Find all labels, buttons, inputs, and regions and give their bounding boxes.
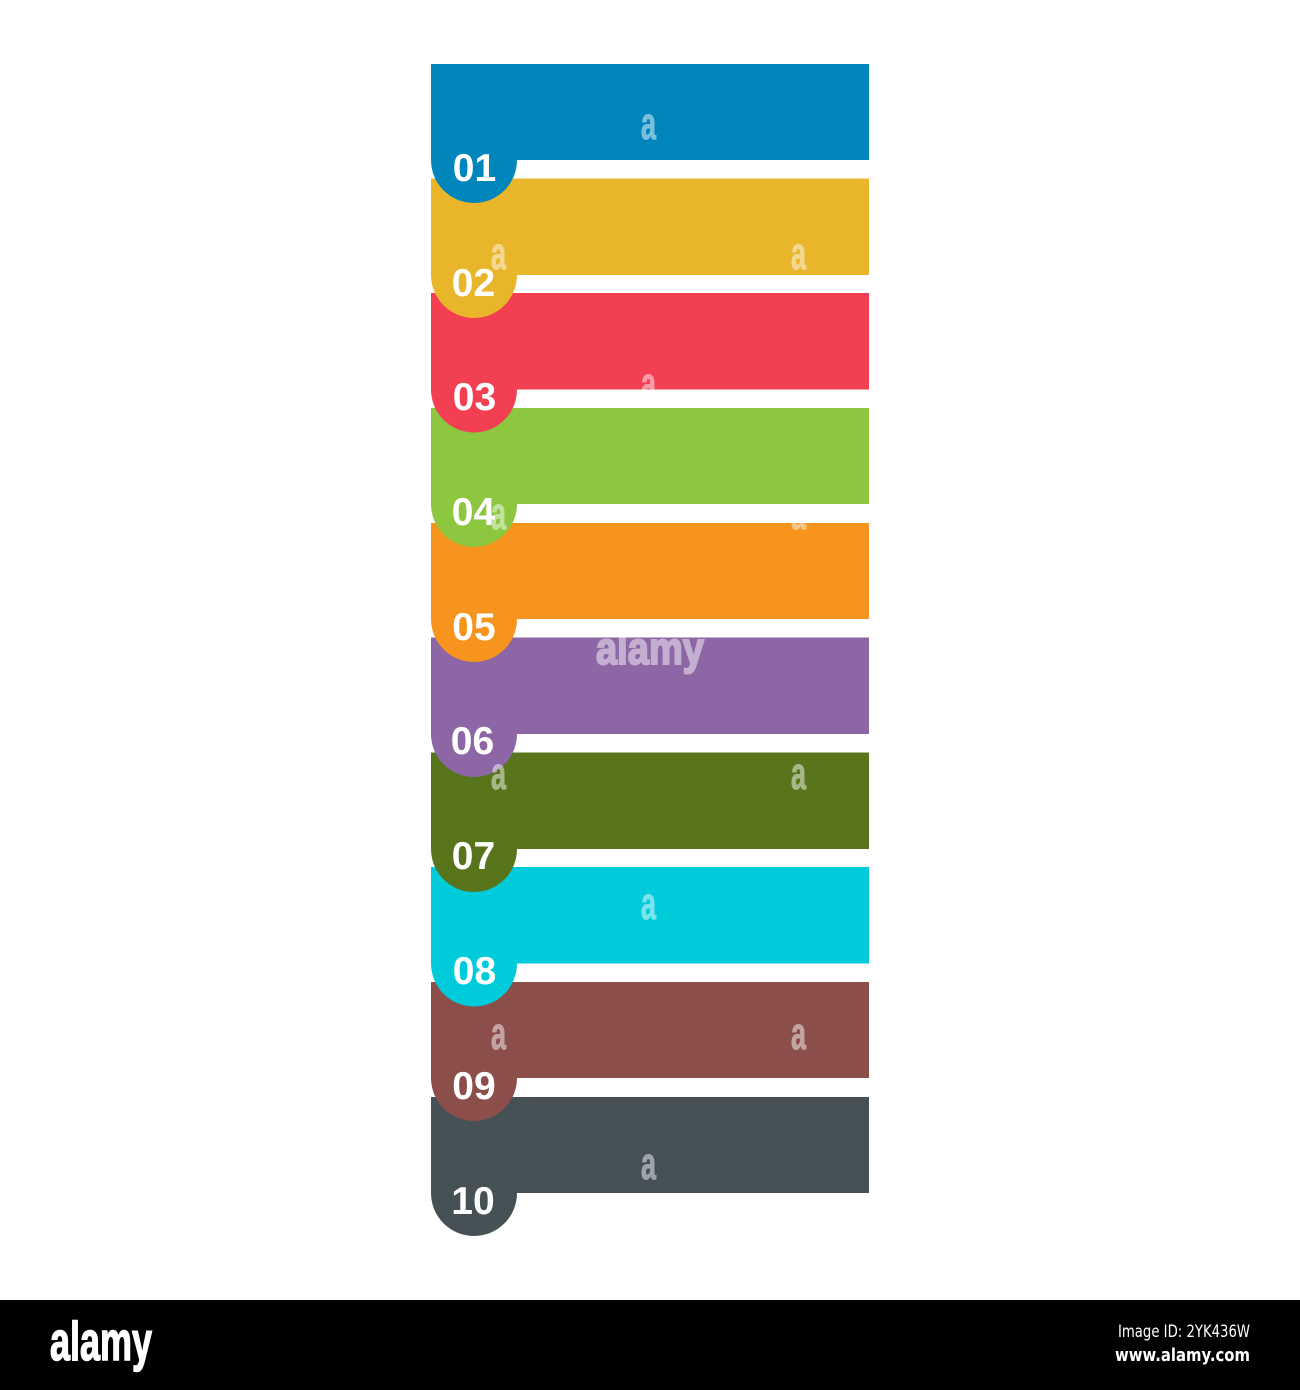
stock watermark overlay: a <box>791 228 807 279</box>
image id: Image ID: 2YK436W <box>1118 1322 1250 1342</box>
website: www.alamy.com <box>1115 1345 1250 1366</box>
item 01: blue bar with tab <box>431 64 869 203</box>
footer bar <box>0 1300 1300 1390</box>
footer logo: alamy <box>50 1310 152 1372</box>
item 05: orange bar with tab: 05 <box>452 606 496 649</box>
stock watermark overlay: a <box>791 1008 807 1059</box>
item 08: cyan bar with tab <box>431 867 869 1006</box>
stock watermark overlay: a <box>791 488 807 539</box>
stock watermark overlay: a <box>641 1138 657 1189</box>
stock watermark overlay: a <box>491 488 507 539</box>
stock watermark overlay: a <box>491 748 507 799</box>
item 03: red bar with tab: 03 <box>453 376 496 419</box>
stock watermark overlay: a <box>791 748 807 799</box>
item 02: yellow bar with tab <box>431 178 869 318</box>
item 04: light green bar with tab: 04 <box>452 491 495 534</box>
stock watermark overlay: alamy <box>596 623 704 674</box>
stock watermark overlay: a <box>641 98 657 149</box>
item 03: red bar with tab <box>431 293 869 432</box>
item 02: yellow bar with tab: 02 <box>452 262 495 305</box>
stock watermark overlay: a <box>491 1008 507 1059</box>
item 05: orange bar with tab <box>431 523 869 662</box>
stock watermark overlay <box>491 98 807 1189</box>
item 07: dark green bar with tab <box>431 752 869 892</box>
item 06: purple bar with tab <box>431 638 869 777</box>
stock watermark overlay: a <box>491 228 507 279</box>
item 08: cyan bar with tab: 08 <box>453 950 496 993</box>
stock watermark overlay: a <box>641 878 657 929</box>
item 04: light green bar with tab <box>431 408 869 547</box>
item 06: purple bar with tab: 06 <box>451 720 494 763</box>
item 09: brown bar with tab: 09 <box>452 1065 496 1108</box>
item 10: slate bar with tab: 10 <box>451 1180 495 1223</box>
item 01: blue bar with tab: 01 <box>453 147 496 190</box>
item 10: slate bar with tab <box>431 1097 869 1236</box>
item 07: dark green bar with tab: 07 <box>452 835 495 878</box>
stock watermark overlay: a <box>641 358 657 409</box>
item 09: brown bar with tab <box>431 982 869 1121</box>
